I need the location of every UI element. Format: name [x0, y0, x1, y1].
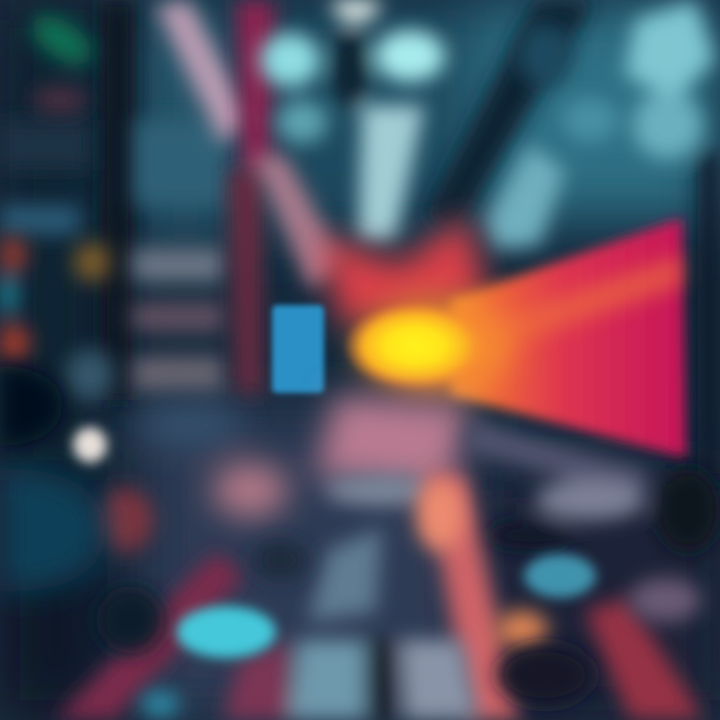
- pale stripe to centre: [252, 155, 345, 290]
- orange streak: [480, 255, 682, 355]
- lower panel rows: [325, 420, 720, 552]
- yellow core: [343, 302, 487, 390]
- lower pink haze: [135, 395, 470, 518]
- orange spot: [496, 610, 548, 650]
- dark floor blobs: [96, 540, 701, 718]
- left shelf rows: [0, 120, 225, 392]
- dark blob lower left: [0, 365, 62, 447]
- upper right light panels: [485, 0, 720, 480]
- orange floor highlight: [416, 479, 464, 551]
- dark diagonal beam: [425, 0, 595, 235]
- blue screen: [272, 305, 324, 393]
- pink diagonal stripe: [155, 0, 250, 145]
- left dark column: [100, 0, 135, 400]
- maroon vertical stripe: [236, 0, 275, 175]
- left indicator lights: [0, 6, 153, 552]
- salmon floor streak: [425, 475, 520, 720]
- white spot: [73, 427, 107, 463]
- orange glow: [360, 299, 510, 395]
- floor grey strips: [222, 528, 478, 720]
- maroon diagonal right: [585, 598, 705, 720]
- large dark blue blob: [0, 468, 105, 592]
- cyan light right: [524, 554, 596, 598]
- ceiling lights: [260, 0, 445, 240]
- red upper glow: [320, 215, 490, 325]
- red display panel: [450, 218, 686, 458]
- maroon diagonal left: [55, 552, 245, 720]
- maroon pillar: [228, 170, 262, 395]
- cyan floor light: [176, 606, 276, 658]
